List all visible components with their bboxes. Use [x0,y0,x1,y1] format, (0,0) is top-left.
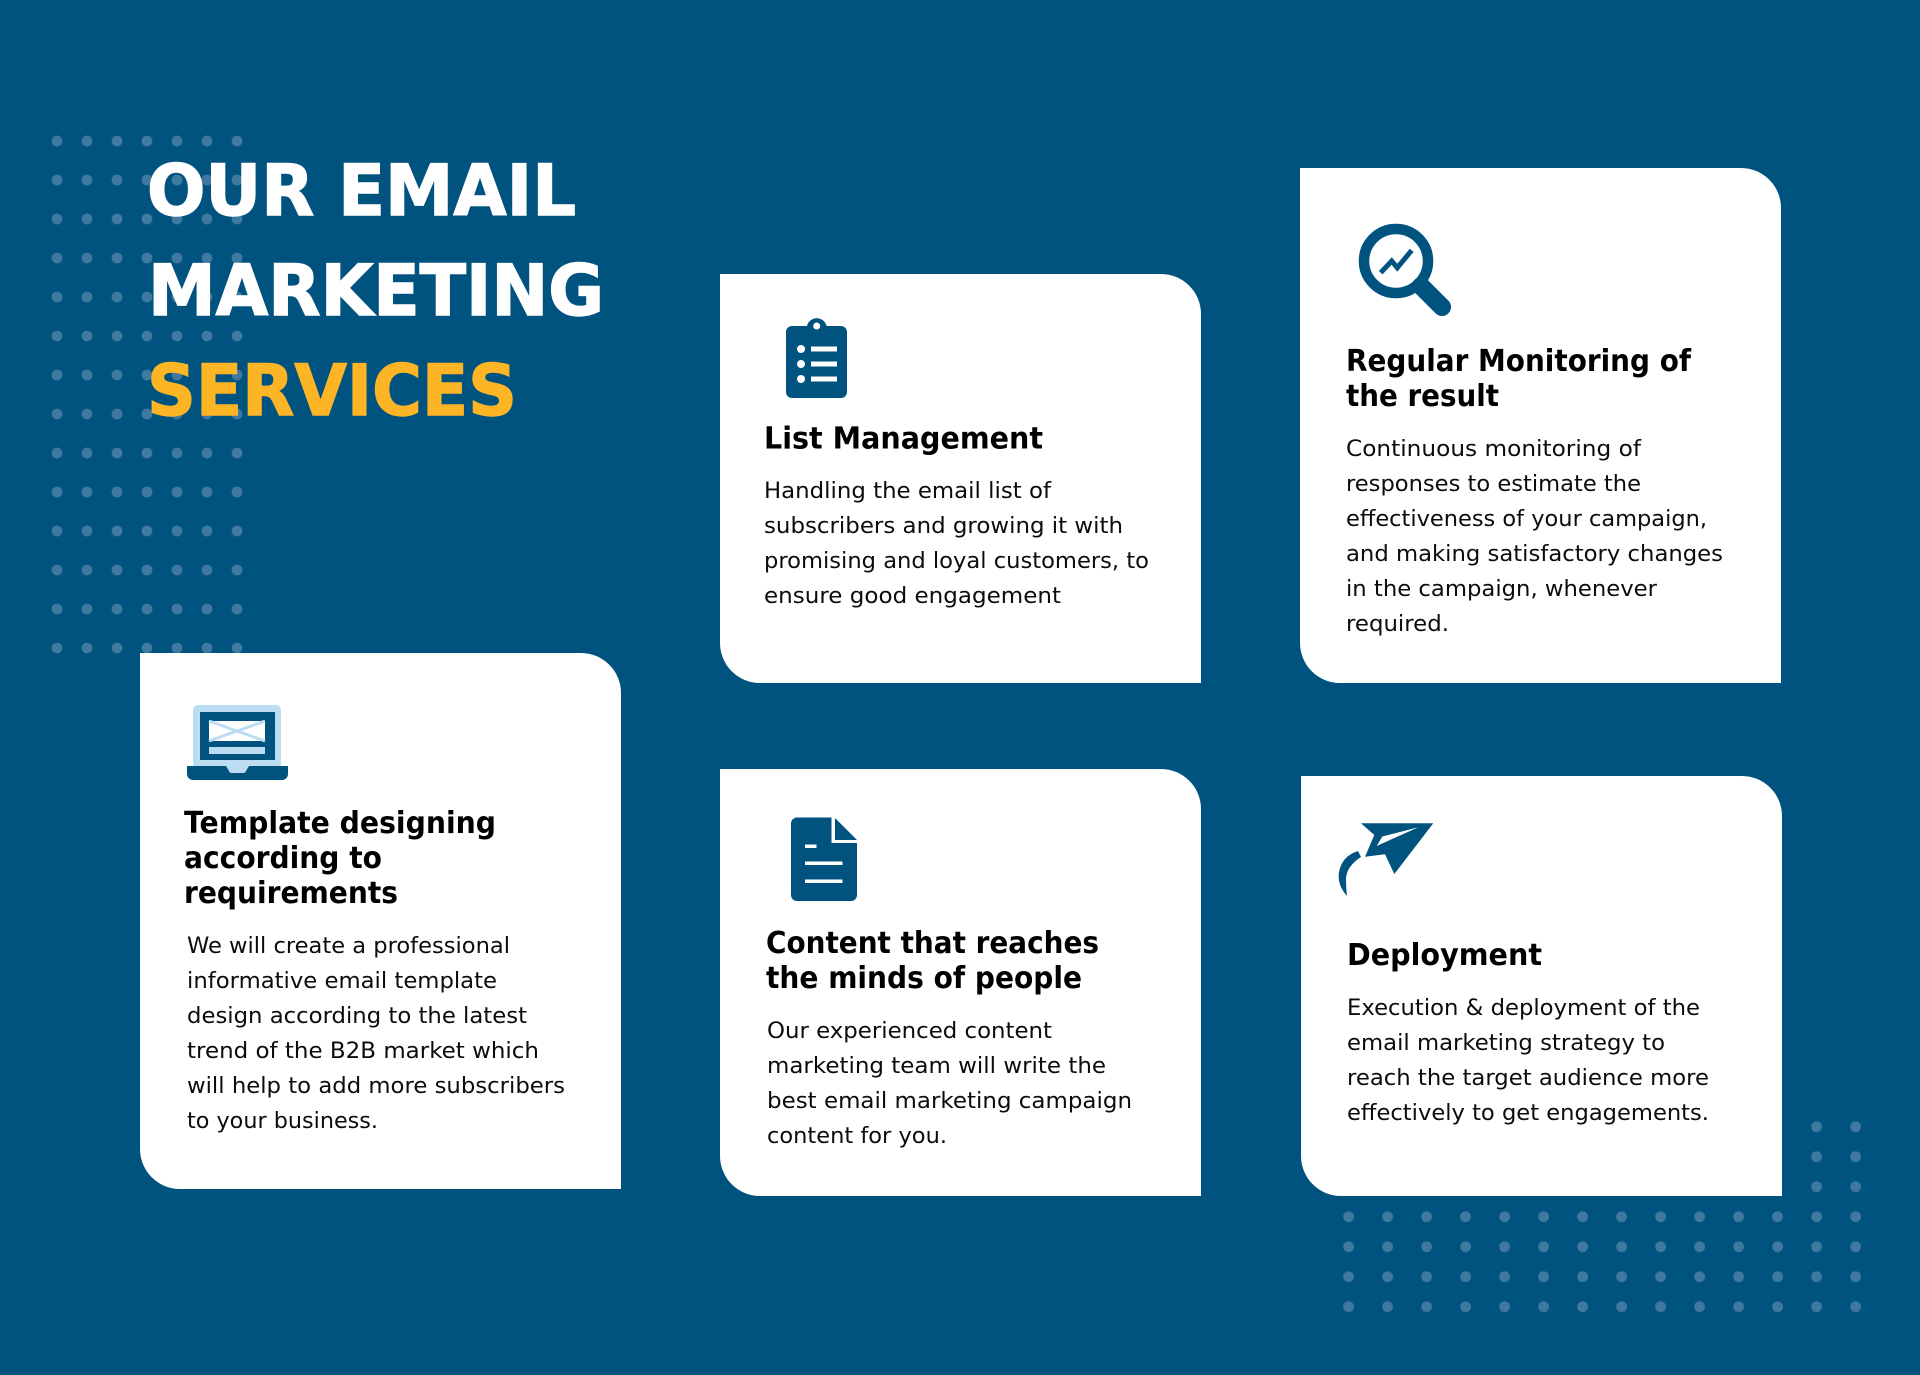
body text [187,934,565,1134]
title: SERVICES [147,350,517,432]
panel: template designing [140,653,621,1189]
title: MARKETING [148,250,604,332]
body text: content for you. [767,1124,947,1149]
body text: promising and loyal customers, to [764,549,1149,574]
panel: list management [720,274,1201,683]
title [147,150,604,432]
body text: required. [1346,612,1449,637]
heading [1346,344,1692,414]
heading: Deployment [1347,938,1542,973]
body text: and making satisfactory changes [1346,542,1723,567]
heading: Template designing [184,806,496,841]
body text [1346,437,1723,637]
heading: requirements [184,876,398,911]
panel: deployment [1301,776,1782,1196]
heading: Regular Monitoring of [1346,344,1692,379]
body text [764,479,1149,609]
heading: according to [184,841,382,876]
icon: magnifier with trend line [1364,229,1442,307]
dot pattern: top left [42,126,252,672]
body text: We will create a professional [187,934,510,959]
heading: List Management [764,422,1043,456]
title: OUR EMAIL [147,150,576,232]
body text: will help to add more subscribers [187,1074,565,1099]
body text: responses to estimate the [1346,472,1641,497]
body text: Continuous monitoring of [1346,437,1642,462]
panel: content [720,769,1201,1196]
body text: design according to the latest [187,1004,527,1029]
body text: Our experienced content [767,1019,1052,1044]
body text: email marketing strategy to [1347,1031,1665,1056]
body text: subscribers and growing it with [764,514,1123,539]
body text: best email marketing campaign [767,1089,1132,1114]
body text: to your business. [187,1109,378,1134]
heading: the result [1346,379,1499,414]
heading: Content that reaches [766,926,1099,961]
body text: effectively to get engagements. [1347,1101,1709,1126]
body text: informative email template [187,969,497,994]
heading [184,806,496,911]
dot pattern: bottom right [1330,1112,1875,1322]
body text: effectiveness of your campaign, [1346,507,1707,532]
body text: marketing team will write the [767,1054,1106,1079]
body text: Handling the email list of [764,479,1052,504]
body text [1347,996,1709,1126]
body text: reach the target audience more [1347,1066,1709,1091]
icon: laptop [187,705,288,780]
body text [767,1019,1132,1149]
heading [766,926,1099,996]
body text: in the campaign, whenever [1346,577,1658,602]
icon: document [791,818,857,901]
body text: trend of the B2B market which [187,1039,539,1064]
panel: regular monitoring [1300,168,1781,683]
heading: the minds of people [766,961,1082,996]
body text: ensure good engagement [764,584,1061,609]
icon: paper plane [1339,823,1433,896]
icon: clipboard [786,318,847,398]
body text: Execution & deployment of the [1347,996,1700,1021]
